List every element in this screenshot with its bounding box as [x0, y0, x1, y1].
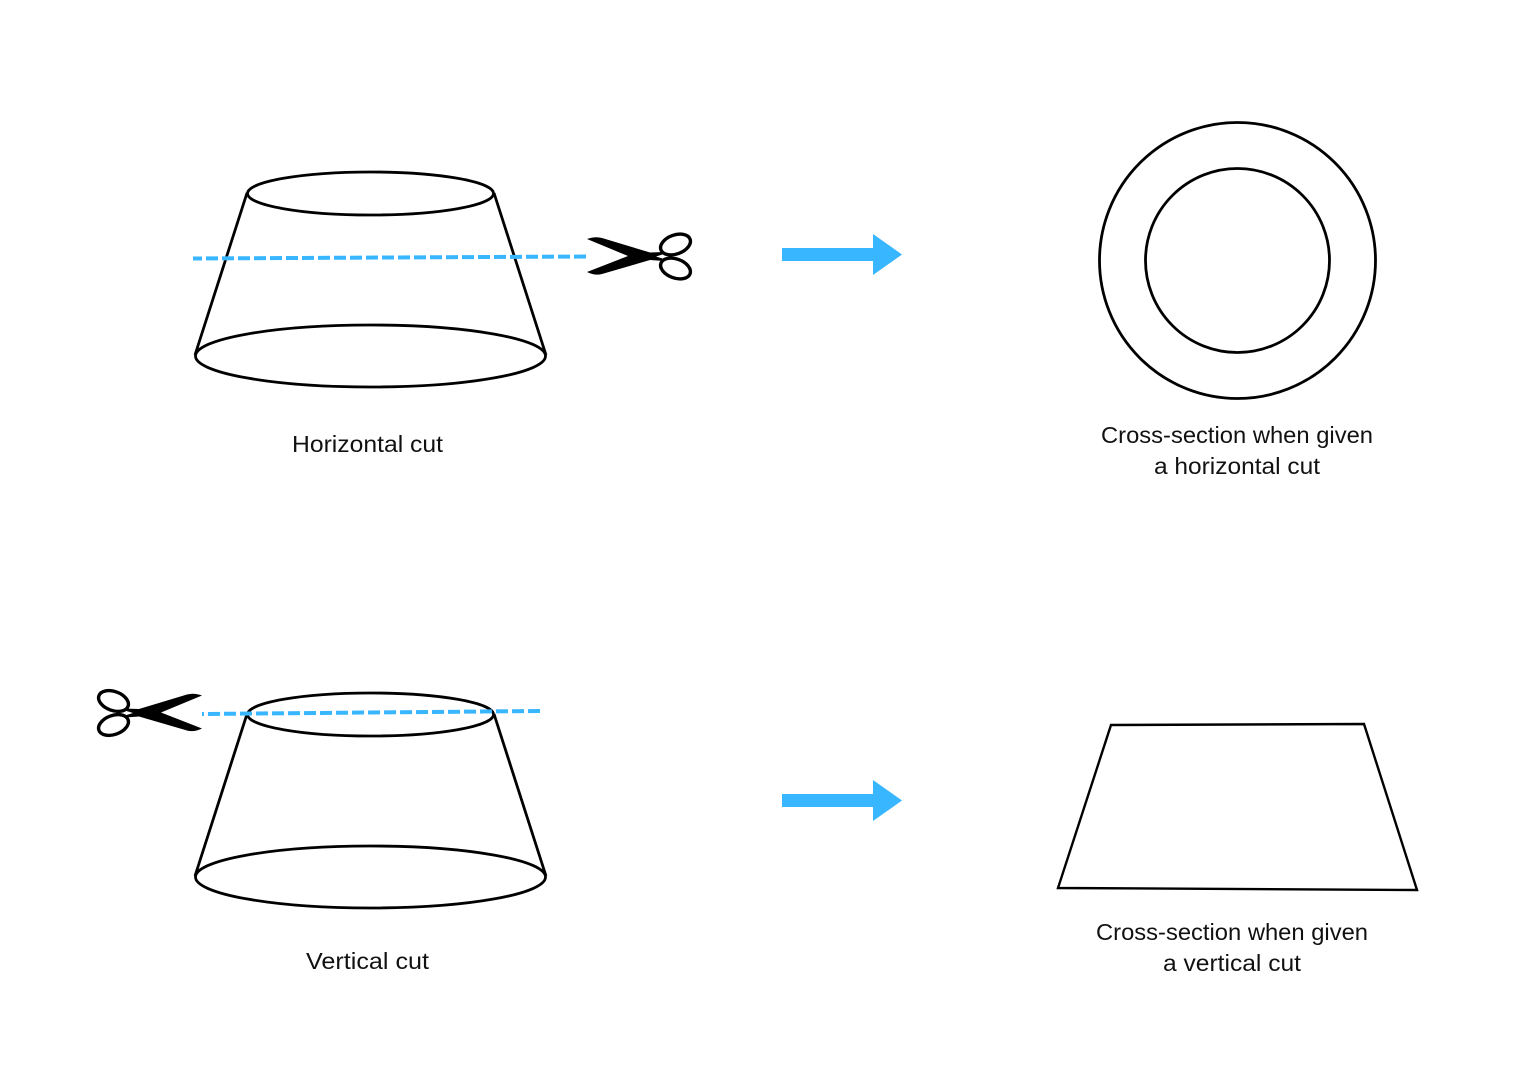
panel: horizontal cut frustum [195, 172, 546, 387]
vertical dashed cut line [202, 711, 540, 714]
arrow: bottom [782, 780, 902, 821]
caption: horizontal cross-section: a horizontal cut [1154, 453, 1321, 479]
caption: vertical cross-section [1096, 919, 1368, 976]
icon: scissors right [587, 230, 693, 283]
caption: vertical cross-section: Cross-section when given [1096, 919, 1368, 945]
arrow: top [782, 234, 902, 275]
panel: vertical cut frustum [195, 693, 546, 908]
caption: vertical cross-section: a vertical cut [1163, 950, 1302, 976]
trapezoid cross-section [1058, 724, 1417, 890]
label: horizontal cut: Horizontal cut [292, 431, 444, 457]
icon: scissors left [96, 687, 202, 739]
caption: horizontal cross-section [1101, 422, 1373, 479]
horizontal dashed cut line [193, 256, 587, 258]
caption: horizontal cross-section: Cross-section when given [1101, 422, 1373, 448]
label: vertical cut: Vertical cut [306, 948, 430, 974]
concentric circles cross-section [1100, 122, 1376, 398]
